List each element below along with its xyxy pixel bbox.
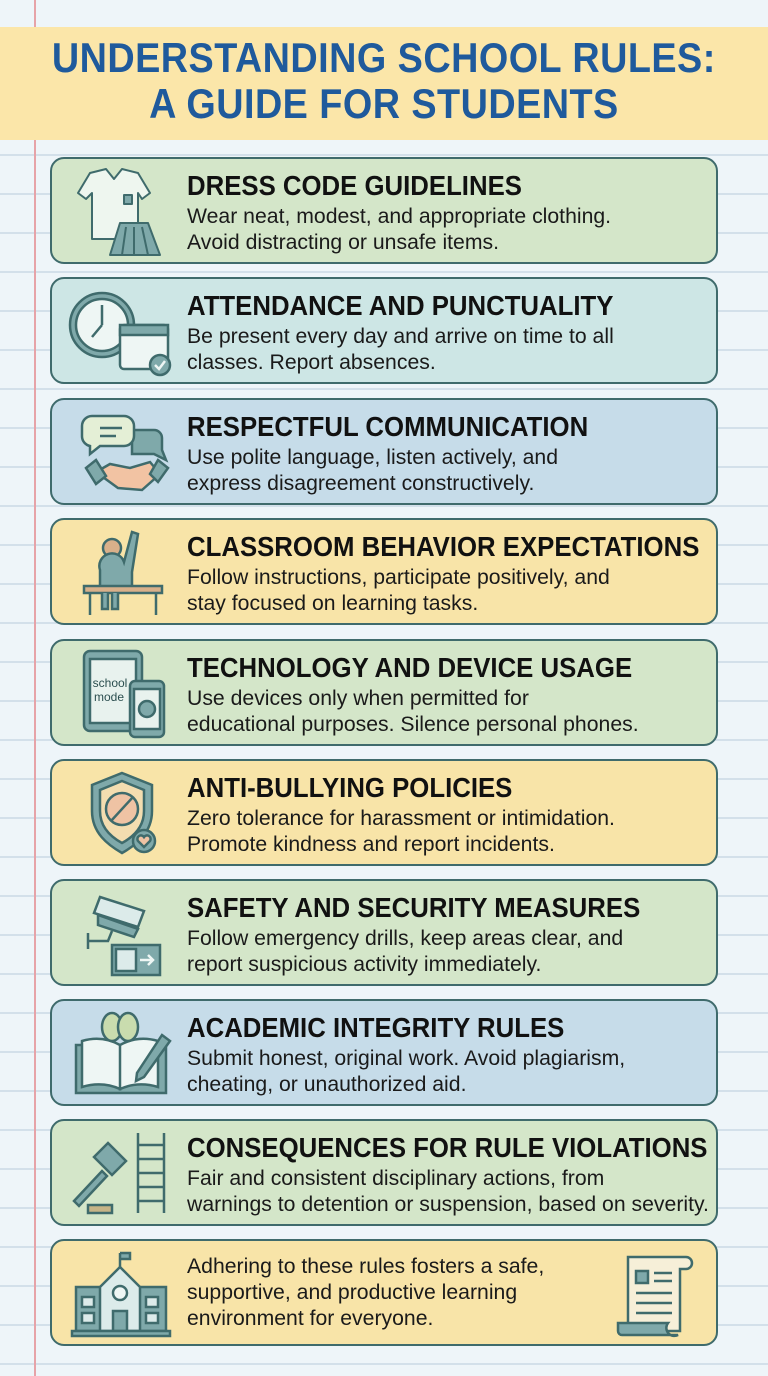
text: Zero tolerance for harassment or intimidation. — [187, 807, 615, 830]
title band — [0, 27, 768, 140]
heading: ACADEMIC INTEGRITY RULES — [187, 1012, 564, 1043]
icon: tablet and phone — [82, 650, 166, 738]
heading: SAFETY AND SECURITY MEASURES — [187, 892, 640, 923]
panel: classroom behavior — [50, 518, 718, 625]
text — [187, 927, 623, 976]
text — [187, 205, 611, 254]
panel: academic integrity — [50, 999, 718, 1106]
icon: gavel and ladder — [72, 1133, 166, 1214]
panel: safety — [50, 879, 718, 986]
heading: TECHNOLOGY AND DEVICE USAGE — [187, 652, 632, 683]
icon: document scroll — [616, 1256, 694, 1338]
panel: conclusion — [50, 1239, 718, 1346]
text: stay focused on learning tasks. — [187, 592, 478, 615]
text — [187, 566, 610, 615]
text: Adhering to these rules fosters a safe, — [187, 1255, 544, 1278]
title — [52, 34, 716, 127]
icon: shield with heart — [90, 772, 156, 854]
text: Follow emergency drills, keep areas clear, and — [187, 927, 623, 950]
text: educational purposes. Silence personal phones. — [187, 713, 639, 736]
panel: communication — [50, 398, 718, 505]
icon: school building — [70, 1252, 172, 1338]
text — [187, 325, 614, 374]
heading: CLASSROOM BEHAVIOR EXPECTATIONS — [187, 531, 699, 562]
icon: shirt and skirt — [77, 168, 161, 256]
heading: DRESS CODE GUIDELINES — [187, 170, 522, 201]
text — [187, 687, 639, 736]
heading: CONSEQUENCES FOR RULE VIOLATIONS — [187, 1132, 707, 1163]
text — [187, 446, 558, 495]
panel: dress code — [50, 157, 718, 264]
text: environment for everyone. — [187, 1307, 433, 1330]
icon: tablet and phone: mode — [94, 690, 124, 704]
text — [187, 807, 615, 856]
text: Be present every day and arrive on time to all — [187, 325, 614, 348]
panel: anti-bullying — [50, 759, 718, 866]
title: UNDERSTANDING SCHOOL RULES: — [52, 34, 716, 81]
text — [187, 1047, 625, 1096]
text: supportive, and productive learning — [187, 1281, 517, 1304]
text: Use devices only when permitted for — [187, 687, 529, 710]
text: Follow instructions, participate positively, and — [187, 566, 610, 589]
text: cheating, or unauthorized aid. — [187, 1073, 466, 1096]
text — [187, 1255, 544, 1330]
text — [187, 1167, 709, 1216]
text: Use polite language, listen actively, and — [187, 446, 558, 469]
icon: clock and calendar — [68, 292, 172, 376]
panel: consequences — [50, 1119, 718, 1226]
heading: RESPECTFUL COMMUNICATION — [187, 411, 588, 442]
icon: speech bubbles and handshake — [80, 414, 170, 492]
text: express disagreement constructively. — [187, 472, 534, 495]
panel: technology — [50, 639, 718, 746]
heading: ANTI-BULLYING POLICIES — [187, 772, 512, 803]
text: warnings to detention or suspension, based on severity. — [187, 1193, 709, 1216]
text: Submit honest, original work. Avoid plagiarism, — [187, 1047, 625, 1070]
heading: ATTENDANCE AND PUNCTUALITY — [187, 290, 613, 321]
panel: attendance — [50, 277, 718, 384]
text: Avoid distracting or unsafe items. — [187, 231, 499, 254]
icon: student raising hand at desk — [82, 530, 164, 615]
icon: tablet and phone: school — [93, 676, 127, 690]
icon: camera and exit sign — [86, 896, 162, 976]
text: Fair and consistent disciplinary actions, from — [187, 1167, 604, 1190]
text: classes. Report absences. — [187, 351, 436, 374]
text: Wear neat, modest, and appropriate clothing. — [187, 205, 611, 228]
text: report suspicious activity immediately. — [187, 953, 541, 976]
text: Promote kindness and report incidents. — [187, 833, 555, 856]
icon: book, brain and pen — [74, 1012, 172, 1094]
title: A GUIDE FOR STUDENTS — [149, 80, 619, 127]
